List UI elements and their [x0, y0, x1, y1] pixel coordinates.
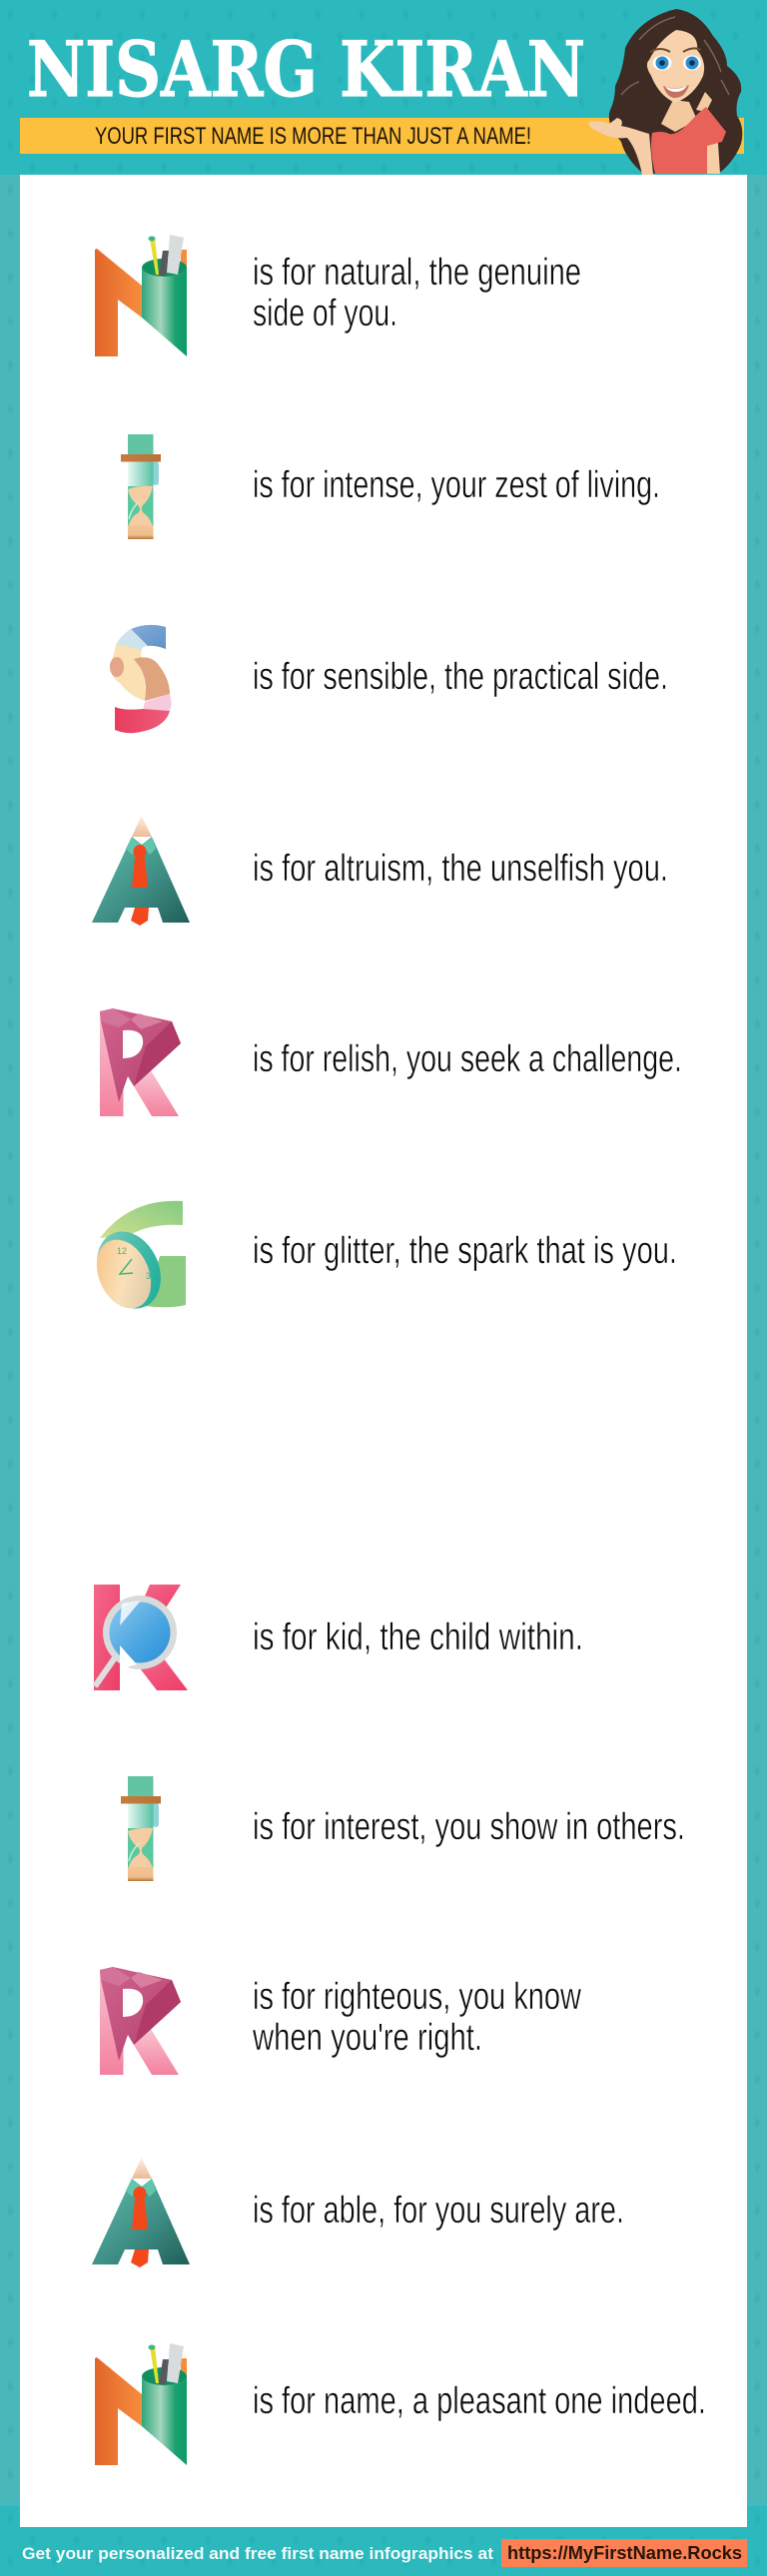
text: N meaning	[253, 252, 581, 334]
icon: letter R gemstone	[100, 1008, 181, 1116]
row: K kid	[94, 1585, 583, 1690]
icon: letter N pencil holder	[95, 2343, 187, 2465]
title: NISARG KIRAN	[27, 25, 585, 114]
icon: letter R gemstone	[100, 1967, 181, 2075]
icon: letter I hourglass	[121, 434, 161, 539]
row: N name	[95, 2343, 706, 2465]
illustration: smiling woman presenting with open hand	[589, 9, 742, 175]
row: G glitter	[85, 1201, 677, 1319]
text: R meaning	[252, 1976, 581, 2059]
text: A meaning: is for able, for you surely are.	[253, 2190, 624, 2232]
icon: letter K magnifying glass	[94, 1585, 188, 1690]
icon: letter A suit and tie	[92, 816, 190, 926]
row: I intense	[121, 434, 660, 539]
row: N natural	[95, 235, 581, 356]
row: I interest	[121, 1776, 685, 1881]
icon: letter G clock: 12	[117, 1246, 127, 1256]
text: R meaning: when you're right.	[252, 2017, 482, 2059]
subtitle band: YOUR FIRST NAME IS MORE THAN JUST A NAME!	[95, 123, 531, 150]
icon: letter A suit and tie	[92, 2158, 190, 2267]
text: K meaning: is for kid, the child within.	[253, 1616, 583, 1658]
icon: letter G clock: 3	[146, 1271, 151, 1281]
text: R meaning: is for righteous, you know	[253, 1976, 581, 2018]
row: R relish	[100, 1008, 682, 1116]
row: A altruism	[92, 816, 668, 926]
text: N meaning: side of you.	[253, 293, 397, 334]
icon: letter S mother and baby	[110, 625, 172, 733]
row: S sensible	[110, 625, 668, 733]
footer link: https://MyFirstName.Rocks	[507, 2543, 742, 2563]
subtitle band	[20, 118, 744, 154]
row: R righteous	[100, 1967, 581, 2075]
text: N meaning: is for natural, the genuine	[253, 252, 581, 294]
icon: letter I hourglass	[121, 1776, 161, 1881]
footer link	[501, 2539, 747, 2567]
row: A able	[92, 2158, 624, 2267]
icon: letter G clock	[85, 1201, 186, 1319]
icon: letter N pencil holder	[95, 235, 187, 356]
footer call to action: Get your personalized and free first name infographics at	[22, 2544, 493, 2563]
